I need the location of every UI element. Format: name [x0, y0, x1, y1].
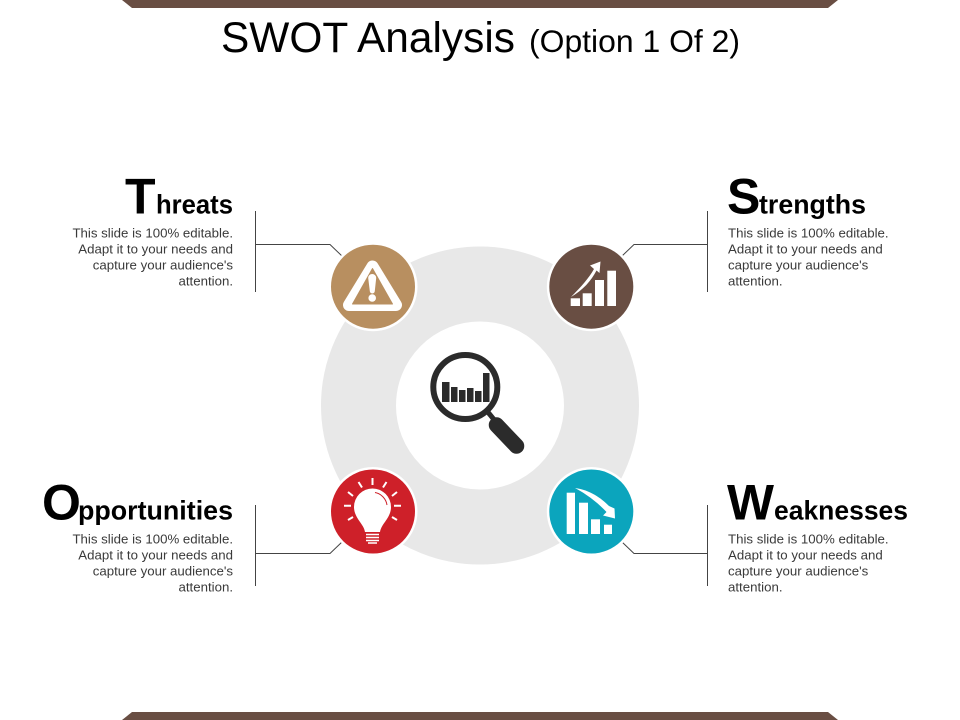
threats heading: hreats	[156, 190, 233, 220]
weaknesses heading: W	[727, 474, 775, 530]
weaknesses connector	[621, 505, 708, 586]
threats description: capture your audience's	[93, 258, 233, 273]
bottom banner bar	[122, 712, 838, 720]
opportunities description: capture your audience's	[93, 564, 233, 579]
opportunities description: Adapt it to your needs and	[78, 548, 233, 563]
strengths description: This slide is 100% editable.	[728, 226, 889, 241]
panel: threats	[72, 168, 418, 331]
weaknesses description: capture your audience's	[728, 564, 869, 579]
strengths heading: trengths	[759, 190, 866, 220]
weaknesses description: Adapt it to your needs and	[728, 548, 883, 563]
central ring	[358, 284, 602, 527]
opportunities icon circle	[328, 467, 418, 556]
title: (Option 1 Of 2)	[529, 23, 740, 59]
opportunities connector	[256, 505, 343, 586]
strengths connector	[621, 211, 708, 292]
strengths icon circle	[547, 242, 636, 331]
weaknesses heading: eaknesses	[774, 496, 908, 526]
threats description: Adapt it to your needs and	[78, 242, 233, 257]
opportunities description: attention.	[178, 580, 233, 595]
threats description: This slide is 100% editable.	[72, 226, 233, 241]
weaknesses description: This slide is 100% editable.	[728, 532, 889, 547]
threats heading: T	[125, 168, 156, 224]
strengths description: Adapt it to your needs and	[728, 242, 883, 257]
threats description: attention.	[178, 274, 233, 289]
top banner bar	[122, 0, 838, 8]
title: SWOT Analysis	[221, 14, 515, 62]
panel: weaknesses	[547, 467, 908, 595]
opportunities description: This slide is 100% editable.	[72, 532, 233, 547]
strengths heading: S	[727, 168, 760, 224]
opportunities heading: O	[42, 474, 81, 530]
opportunities heading: pportunities	[78, 496, 233, 526]
strengths description: attention.	[728, 274, 783, 289]
weaknesses description: attention.	[728, 580, 783, 595]
threats connector	[256, 211, 343, 292]
threats icon circle	[328, 242, 418, 331]
icon: magnifying glass with bars	[433, 355, 516, 446]
weaknesses icon circle	[547, 467, 636, 556]
panel: opportunities	[42, 467, 418, 595]
strengths description: capture your audience's	[728, 258, 869, 273]
panel: strengths	[547, 168, 889, 331]
